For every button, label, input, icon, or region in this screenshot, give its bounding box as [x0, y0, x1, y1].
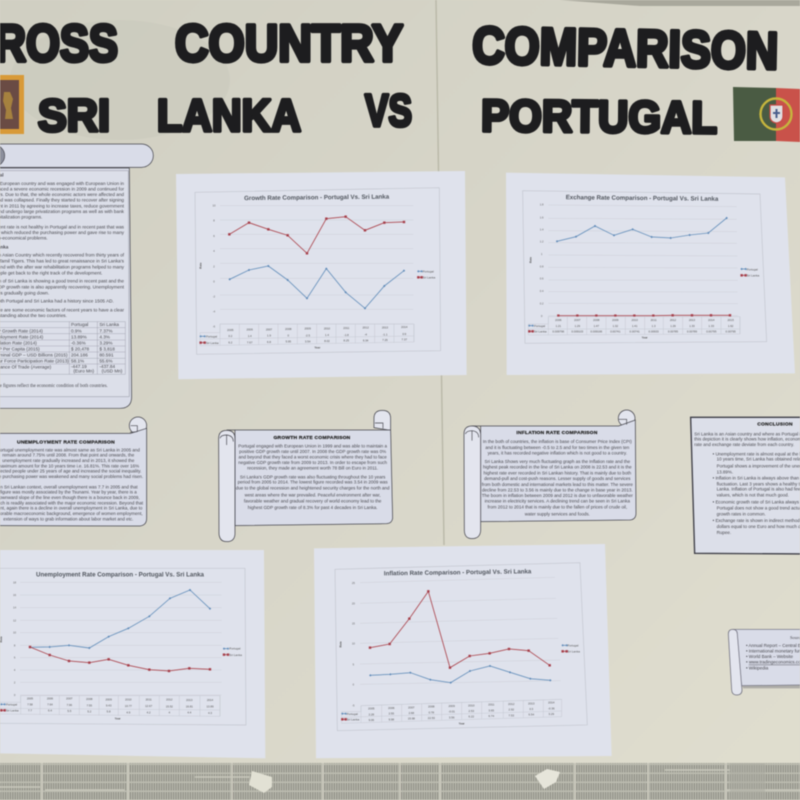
data table: economic factors: 80.591 — [99, 353, 114, 358]
chart: exchange rate comparison: 1.29 — [575, 324, 580, 328]
chart: unemployment rate comparison: 4.9 — [126, 710, 131, 714]
scroll: inflation rate comparison — [464, 410, 636, 539]
chart: unemployment rate comparison: 2014 — [207, 698, 214, 702]
title line 2: Sri Lanka vs Portugal: LANKA — [157, 90, 301, 141]
chart: inflation rate comparison: Sri Lanka — [567, 650, 580, 654]
scroll text: highest rate ever recorded in Sri Lankan history. That is mainly due to both — [483, 470, 632, 475]
chart: exchange rate comparison: 0.00789 — [687, 330, 698, 334]
chart: unemployment rate comparison: 7.64 — [47, 703, 53, 707]
chart: unemployment rate comparison: 2010 — [125, 698, 132, 702]
chart: inflation rate comparison: Portugal — [567, 643, 579, 647]
chart: unemployment rate comparison: 2005 — [27, 696, 34, 700]
chart: inflation rate comparison: 15 — [352, 622, 355, 626]
chart: inflation rate comparison: -0.01 — [448, 710, 455, 714]
icon: Sri Lanka flag — [0, 75, 24, 134]
scroll text: maximum amount for the 10 years time i.e. 16.81%. This rate over 16% — [0, 463, 139, 468]
chart: exchange rate comparison: 2011 — [651, 318, 657, 322]
chart: inflation rate comparison: 0.3 — [529, 707, 534, 711]
chart: exchange rate comparison: 2012 — [670, 318, 677, 322]
chart: inflation rate comparison: Rate — [338, 641, 342, 647]
newspaper strip, bottom — [0, 763, 800, 800]
conclusion text: values, which is not that much good. — [717, 492, 789, 497]
chart: growth rate comparison: Year — [314, 345, 321, 349]
chart: growth rate comparison: 8 — [213, 219, 215, 223]
data table: economic factors — [0, 322, 125, 374]
chart: exchange rate comparison: 1.33 — [709, 324, 714, 328]
chart: inflation rate comparison: 0 — [353, 683, 355, 687]
scroll text: due to the global recession and heightened security charges for the north and — [236, 485, 390, 490]
chart: unemployment rate comparison: 4 — [169, 711, 171, 715]
chart: unemployment rate comparison: 2007 — [66, 697, 73, 701]
chart: inflation rate comparison: 2.55 — [389, 712, 394, 716]
chart: exchange rate comparison: 0.00785 — [668, 330, 679, 334]
chart: exchange rate comparison: 2007 — [574, 318, 581, 322]
chart: growth rate comparison: 2013 — [382, 325, 389, 329]
data table: economic factors: -437.84 — [99, 364, 116, 369]
chart: unemployment rate comparison: 5.2 — [87, 709, 92, 713]
data table: economic factors: 13.89% — [71, 334, 87, 339]
data table: economic factors: Portugal — [71, 322, 88, 327]
conclusion text: 13.89%. — [717, 469, 733, 474]
chart: inflation rate comparison: 2006 — [388, 706, 395, 710]
chart: exchange rate comparison: 2009 — [612, 318, 619, 322]
chart: growth rate comparison: 5.95 — [286, 340, 291, 344]
chart: exchange rate comparison: 1.41 — [632, 324, 638, 328]
chart: inflation rate comparison: 9.06 — [369, 718, 375, 722]
chart: inflation rate comparison: 7.53 — [509, 713, 514, 717]
chart: growth rate comparison: Growth Rate Comparison - Portugal Vs. Sri Lanka — [244, 194, 390, 202]
chart: unemployment rate comparison: 5.5 — [67, 709, 72, 713]
chart: exchange rate comparison: Exchange Rate Comparison - Portugal Vs. Sri Lanka — [566, 194, 719, 203]
scroll text: negative GDP growth rate from 2009 to 2013. In order to escape from such — [238, 460, 388, 465]
chart: exchange rate comparison: 1.21 — [556, 324, 562, 328]
scroll text: In Sri Lankan context, overall unemployment was 7.7 in 2005 and that — [0, 484, 138, 489]
data table: economic factors: 3.29% — [99, 340, 113, 345]
chart: unemployment rate comparison: Year — [115, 717, 122, 721]
chart: inflation rate comparison: 2.28 — [369, 712, 375, 716]
chart: unemployment rate comparison: Portugal — [6, 703, 17, 707]
chart: exchange rate comparison: Rate — [528, 257, 532, 263]
scroll text: recession, they made an agreement worth 78 Bill on Euro in 2011. — [247, 465, 378, 470]
chart: unemployment rate comparison: 16 — [13, 593, 17, 597]
scroll text — [482, 439, 633, 516]
chart: exchange rate comparison: 1.6 — [540, 215, 544, 219]
chart: unemployment rate comparison: 15.52 — [166, 704, 173, 708]
chart: unemployment rate comparison: 18 — [13, 581, 17, 585]
chart: inflation rate comparison: 3.65 — [489, 708, 494, 712]
chart: unemployment rate comparison: 16.81 — [186, 705, 193, 709]
scroll text: from 2012 to 2014 that is mainly due to the fallen of prices of crude oil, — [488, 504, 627, 509]
data table: economic factors: (Euro Mn) — [73, 369, 94, 374]
scroll: sources — [728, 629, 800, 695]
newspaper strip, top right — [560, 0, 800, 6]
chart: inflation rate comparison: 10 — [352, 642, 355, 646]
chart: growth rate comparison: Rate — [198, 262, 202, 269]
chart: exchange rate comparison: 1.8 — [540, 203, 544, 207]
sources list — [746, 643, 800, 670]
chart: growth rate comparison: 10 — [213, 204, 216, 208]
chart: growth rate comparison: 2006 — [247, 328, 253, 332]
chart: exchange rate comparison: 2006 — [555, 318, 562, 322]
data table: economic factors: (USD Mn) — [102, 369, 123, 374]
icon: Portugal flag — [733, 87, 800, 142]
chart: growth rate comparison: 2 — [213, 264, 215, 268]
chart: growth rate comparison: 7.67 — [247, 340, 253, 344]
introduction text — [0, 173, 125, 318]
scroll text: favorable weather and gradual recovery of world economy lead to the — [244, 498, 382, 503]
scroll text: and it is fluctuating between -0.5 to 2.5 and for two times in the given ten — [485, 445, 630, 450]
chart: unemployment rate comparison: 2012 — [166, 698, 173, 702]
scroll text: figure was mostly associated by the Tsunami. Year by year, there is a — [0, 490, 137, 495]
chart: inflation rate comparison: 3.56 — [449, 715, 455, 719]
chart: growth rate comparison: 0.2 — [228, 334, 233, 338]
chart: growth rate comparison: 2010 — [324, 326, 331, 330]
chart: growth rate comparison: -2 — [213, 294, 216, 298]
data table: economic factors: -0.36% — [71, 340, 86, 345]
chart: exchange rate comparison: 0.8 — [540, 264, 544, 268]
chart: growth rate comparison: 6 — [213, 234, 215, 238]
scroll text: decline from 22.53 to 3.56 is mainly due to the change in base year in 2013. — [482, 488, 633, 493]
chart: exchange rate comparison: 1.2 — [540, 240, 544, 244]
paper scrap pinned at right — [535, 769, 560, 789]
chart: growth rate comparison: 2014 — [401, 325, 408, 329]
chart: exchange rate comparison: 2010 — [632, 318, 638, 322]
chart: inflation rate comparison: Portugal — [347, 712, 358, 716]
chart: growth rate comparison: 2008 — [285, 327, 292, 331]
chart: unemployment rate comparison: Sri Lanka — [229, 653, 242, 657]
chart: growth rate comparison: 8.02 — [324, 339, 330, 343]
chart: inflation rate comparison: 2005 — [368, 707, 375, 711]
chart: exchange rate comparison: 0 — [541, 314, 543, 318]
chart: unemployment rate comparison: 12 — [13, 618, 17, 622]
chart: exchange rate comparison: 0.009796 — [552, 330, 565, 334]
chart: unemployment rate comparison: 10.77 — [125, 704, 132, 708]
chart: exchange rate comparison: 1.4 — [540, 227, 544, 231]
scroll text: demand-pull and cost-push reasons. Lesser supply of goods and services — [484, 476, 631, 481]
scroll text: extension of ways to grab information about labor market and etc. — [3, 516, 133, 521]
chart: growth rate comparison: 7.37 — [402, 338, 407, 342]
chart: inflation rate comparison: 6.74 — [489, 714, 494, 718]
chart: inflation rate comparison: -0.36 — [548, 706, 555, 710]
data table: economic factors: $ 20,478 — [71, 347, 90, 352]
data table: economic factors: 7.37% — [99, 328, 113, 333]
panel: conclusion — [691, 417, 800, 554]
chart: exchange rate comparison: 0.00795 — [706, 330, 717, 334]
chart: exchange rate comparison: 0.00741 — [630, 330, 640, 334]
panel header bar — [0, 144, 153, 167]
chart: exchange rate comparison: Year — [642, 336, 649, 340]
chart: growth rate comparison: 2011 — [343, 326, 350, 330]
chart: growth rate comparison: 2009 — [305, 327, 311, 331]
chart: exchange rate comparison: 1 — [541, 252, 543, 256]
scroll text — [0, 447, 144, 521]
scroll text: west areas where the war prevailed. Peaceful environment after war, — [245, 493, 381, 498]
chart: unemployment rate comparison: 0 — [14, 693, 16, 697]
scroll text: water supply services and foods. — [525, 511, 590, 516]
chart: growth rate comparison: Sri Lanka — [206, 341, 219, 345]
chart: inflation rate comparison: 2014 — [548, 701, 555, 705]
chart: growth rate comparison: 1.4 — [325, 333, 329, 337]
chart: growth rate comparison: 2005 — [227, 328, 234, 332]
chart: exchange rate comparison: 0.00933 — [649, 330, 659, 334]
scroll text: The boom in inflation between 2009 and 2012 is due to unfavorable weather — [482, 493, 633, 498]
chart: inflation rate comparison: 2010 — [468, 703, 475, 707]
chart: growth rate comparison: -2.5 — [305, 333, 311, 337]
chart: exchange rate comparison: 2015 — [727, 318, 734, 322]
scroll text: from both domestic and international markets lead to this matter. The severe — [482, 482, 633, 487]
chart: inflation rate comparison: 3.29 — [549, 712, 554, 716]
chart: unemployment rate comparison: 7.96 — [67, 703, 73, 707]
panel body — [0, 168, 132, 408]
chart: unemployment rate comparison: 2009 — [106, 697, 112, 701]
chart: exchange rate comparison: 0.2 — [540, 301, 544, 305]
chart: inflation rate comparison: Inflation Rate Comparison - Portugal Vs. Sri Lanka — [384, 568, 532, 577]
scroll text: remain around 7.75% until 2008. From that point and onwards, the — [2, 453, 135, 458]
chart: unemployment rate comparison: 5.8 — [107, 710, 111, 714]
title line 2: Sri Lanka vs Portugal: PORTUGAL — [481, 90, 717, 143]
chart: inflation rate comparison: 22.53 — [428, 716, 435, 720]
chart: unemployment rate comparison: 2008 — [86, 697, 93, 701]
chart: unemployment rate comparison: 6.4 — [48, 709, 52, 713]
chart: exchange rate comparison: 1.3 — [652, 324, 656, 328]
chart: unemployment rate comparison: Unemployment Rate Comparison - Portugal Vs. Sri Lanka — [36, 572, 205, 579]
conclusion text — [694, 432, 800, 535]
chart: inflation rate comparison: 2.92 — [509, 708, 514, 712]
chart: inflation rate comparison: 2011 — [488, 703, 495, 707]
chart: exchange rate comparison: 2014 — [708, 318, 715, 322]
chart: unemployment rate comparison: 4.4 — [187, 711, 192, 715]
sources list: • Wikipedia — [746, 665, 769, 670]
conclusion heading: CONCLUSION — [757, 422, 793, 428]
chart: unemployment rate comparison: 2013 — [186, 698, 193, 702]
scroll text: Portugal unemployment rate was almost same as Sri Lanka in 2005 and — [0, 447, 140, 452]
chart: growth rate comparison: Portugal — [206, 335, 217, 339]
chart: exchange rate comparison: Sri Lanka — [534, 330, 547, 334]
chart: growth rate comparison: Sri Lanka — [423, 276, 436, 280]
scroll: growth rate comparison — [219, 410, 393, 542]
chart: growth rate comparison: 0.9 — [402, 332, 407, 336]
chart: unemployment rate comparison: 2011 — [146, 698, 152, 702]
chart: inflation rate comparison: 20 — [352, 601, 355, 605]
chart: unemployment rate comparison: 2 — [14, 680, 16, 684]
conclusion text: growth rates in common. — [717, 511, 766, 516]
chart: growth rate comparison: 1.4 — [248, 334, 252, 338]
chart: inflation rate comparison: 6.54 — [529, 713, 534, 717]
scroll text: years, it has recorded negative inflation which is not good to a country. — [488, 451, 627, 456]
chart: growth rate comparison: 2007 — [266, 327, 273, 331]
chart: inflation rate comparison: 2007 — [408, 705, 415, 709]
chart: growth rate comparison: 6.2 — [228, 341, 233, 345]
data table: economic factors: $ 3,818 — [99, 347, 115, 352]
chart: growth rate comparison: -4 — [364, 333, 367, 337]
chart: unemployment rate comparison: Portugal — [229, 647, 241, 651]
chart: growth rate comparison: Portugal — [423, 269, 434, 273]
chart: exchange rate comparison: Portugal — [747, 267, 758, 271]
chart: exchange rate comparison: 0.4 — [540, 289, 544, 293]
chart: growth rate comparison: 7.25 — [382, 338, 388, 342]
sources list: • World Bank – Website — [746, 654, 794, 659]
chart: inflation rate comparison: 25 — [352, 581, 355, 585]
chart: exchange rate comparison: 2013 — [689, 318, 696, 322]
chart: growth rate comparison: -1.8 — [344, 333, 349, 337]
chart: inflation rate comparison: 2012 — [508, 702, 515, 706]
chart: inflation rate comparison: 2.53 — [469, 709, 474, 713]
paper scrap pinned at left — [249, 771, 272, 793]
scroll text: downward slope of the line even though there is a bounce back in 2009, — [0, 495, 140, 500]
chart: inflation rate comparison: 2.68 — [409, 711, 414, 715]
scroll text — [236, 444, 390, 510]
chart: unemployment rate comparison — [0, 550, 265, 758]
scroll text: Sri Lanka Shows very much fluctuating graph as the Inflation rate and the — [485, 459, 631, 464]
chart: unemployment rate comparison: 7.7 — [28, 708, 32, 712]
chart: growth rate comparison: 2012 — [362, 326, 369, 330]
scroll text: Sri Lanka's GDP growth rate was also fluctuating throughout the 10 years — [240, 474, 386, 479]
chart: growth rate comparison: 1.9 — [267, 334, 271, 338]
chart: growth rate comparison: -1.1 — [383, 332, 388, 336]
chart: exchange rate comparison: 1.47 — [594, 324, 599, 328]
chart: unemployment rate comparison: 4 — [14, 668, 16, 672]
chart: unemployment rate comparison: 4.2 — [147, 710, 151, 714]
scroll: unemployment rate comparison — [0, 417, 147, 526]
chart: inflation rate comparison: Sri Lanka — [347, 718, 360, 722]
chart: unemployment rate comparison: Sri Lanka — [6, 709, 19, 713]
chart: exchange rate comparison: 0.009166 — [590, 330, 603, 334]
scroll text: period from 2005 to 2014. The lowest figure recorded was 3.54 in 2009 was — [238, 480, 388, 485]
scroll text: and beyond that they faced a worst economic crisis where they had to face — [238, 455, 387, 460]
chart: exchange rate comparison: 1.62 — [728, 324, 734, 328]
chart: exchange rate comparison: 1.29 — [670, 324, 676, 328]
chart: unemployment rate comparison: 12.67 — [145, 704, 153, 708]
chart: unemployment rate comparison: 9.43 — [106, 704, 112, 708]
chart: exchange rate comparison: Portugal — [534, 324, 545, 328]
scroll heading: INFLATION RATE COMPARISON — [516, 430, 598, 436]
chart: growth rate comparison: -4 — [213, 309, 216, 313]
chart: inflation rate comparison — [314, 544, 612, 758]
chart: growth rate comparison: -6 — [213, 325, 216, 329]
data table: economic factors: 4.3% — [99, 334, 110, 339]
chart: inflation rate comparison: 2009 — [449, 704, 455, 708]
scroll text: unemployment rate gradually increased and in 2013, it showed the — [2, 458, 135, 463]
title line 1: Cross Country Comparison: COUNTRY — [175, 15, 403, 73]
chart: exchange rate comparison: 0.00795 — [726, 330, 736, 334]
chart: inflation rate comparison: 9.98 — [389, 717, 394, 721]
chart: exchange rate comparison: 0.009103 — [571, 330, 584, 334]
chart: inflation rate comparison: 6.22 — [469, 715, 474, 719]
chart: inflation rate comparison: 0.78 — [429, 710, 434, 714]
chart: growth rate comparison: 4 — [213, 249, 215, 253]
chart: inflation rate comparison: 15.98 — [408, 717, 415, 721]
chart: exchange rate comparison: 0.6 — [540, 277, 544, 281]
chart: unemployment rate comparison: 7.58 — [27, 703, 33, 707]
data table: economic factors: Sri Lanka — [99, 322, 119, 327]
scroll text: In the both of countries, the inflation is base of Consumer Price Index (CPI) — [483, 439, 632, 444]
chart: growth rate comparison: 0 — [288, 334, 290, 338]
chart: inflation rate comparison: -5 — [352, 703, 355, 707]
chart: unemployment rate comparison: 7.55 — [87, 703, 92, 707]
title line 2: Sri Lanka vs Portugal: SRI — [38, 90, 110, 141]
scroll heading: UNEMPLOYMENT RATE COMPARISON — [17, 439, 115, 445]
chart: unemployment rate comparison: 10 — [13, 631, 17, 635]
data table: economic factors: 55.6% — [99, 359, 113, 364]
data table: economic factors: 0.9% — [71, 328, 82, 333]
chart: unemployment rate comparison: 2006 — [47, 696, 54, 700]
conclusion text: Rupee. — [717, 530, 731, 535]
title line 2: Sri Lanka vs Portugal — [38, 85, 717, 143]
chart: unemployment rate comparison: 4.3 — [208, 711, 212, 715]
conclusion text: rate and exchange rate deviate from each country. — [694, 442, 794, 447]
chart: growth rate comparison: 3.54 — [305, 339, 311, 343]
chart: exchange rate comparison: 1.32 — [613, 324, 618, 328]
chart: growth rate comparison: 6.34 — [363, 338, 369, 342]
chart: unemployment rate comparison: 13.89 — [206, 705, 214, 709]
scroll text: increase in electricity services. A declining trend can be seen in Sri Lanka — [485, 498, 630, 503]
data table: economic factors: 58.1% — [71, 359, 84, 364]
panel: introduction — [0, 144, 153, 408]
chart: exchange rate comparison: 2008 — [593, 318, 600, 322]
data table: economic factors: -447.19 — [71, 364, 87, 369]
chart: growth rate comparison: 0 — [213, 279, 215, 283]
chart: exchange rate comparison: 0.00741 — [610, 330, 621, 334]
chart: inflation rate comparison: 2008 — [428, 705, 435, 709]
chart: inflation rate comparison: Year — [459, 721, 466, 725]
chart: exchange rate comparison: 1.33 — [689, 324, 695, 328]
chart: inflation rate comparison: 2013 — [528, 701, 535, 705]
chart: unemployment rate comparison: 6 — [14, 656, 16, 660]
chart: unemployment rate comparison: 14 — [13, 606, 17, 610]
scroll text: highest GDP growth rate of 8.3% for past 4 decades in Sri Lanka. — [248, 505, 378, 510]
scroll heading: GROWTH RATE COMPARISON — [273, 435, 351, 441]
chart: growth rate comparison: 8.25 — [344, 339, 349, 343]
chart: growth rate comparison — [176, 171, 467, 379]
title line 2: Sri Lanka vs Portugal: VS — [365, 85, 412, 136]
chart: unemployment rate comparison: 8 — [14, 643, 16, 647]
chart: growth rate comparison: 6.8 — [267, 340, 271, 344]
title line 1: Cross Country Comparison — [0, 15, 779, 81]
data table: economic factors: 204.186 — [71, 353, 88, 358]
chart: exchange rate comparison — [506, 173, 795, 375]
chart: inflation rate comparison: 5 — [353, 662, 355, 666]
scroll text: positive GDP growth rate until 2007. In 2008 the GDP growth rate was 0% — [239, 449, 386, 454]
scroll text: highest peak recorded in the line of Sri Lanka on 2008 is 22.53 and it is the — [483, 465, 632, 470]
scroll text: Portugal engaged with European Union in 1999 and was able to maintain a — [238, 444, 388, 449]
chart: exchange rate comparison: Sri Lanka — [747, 274, 760, 278]
